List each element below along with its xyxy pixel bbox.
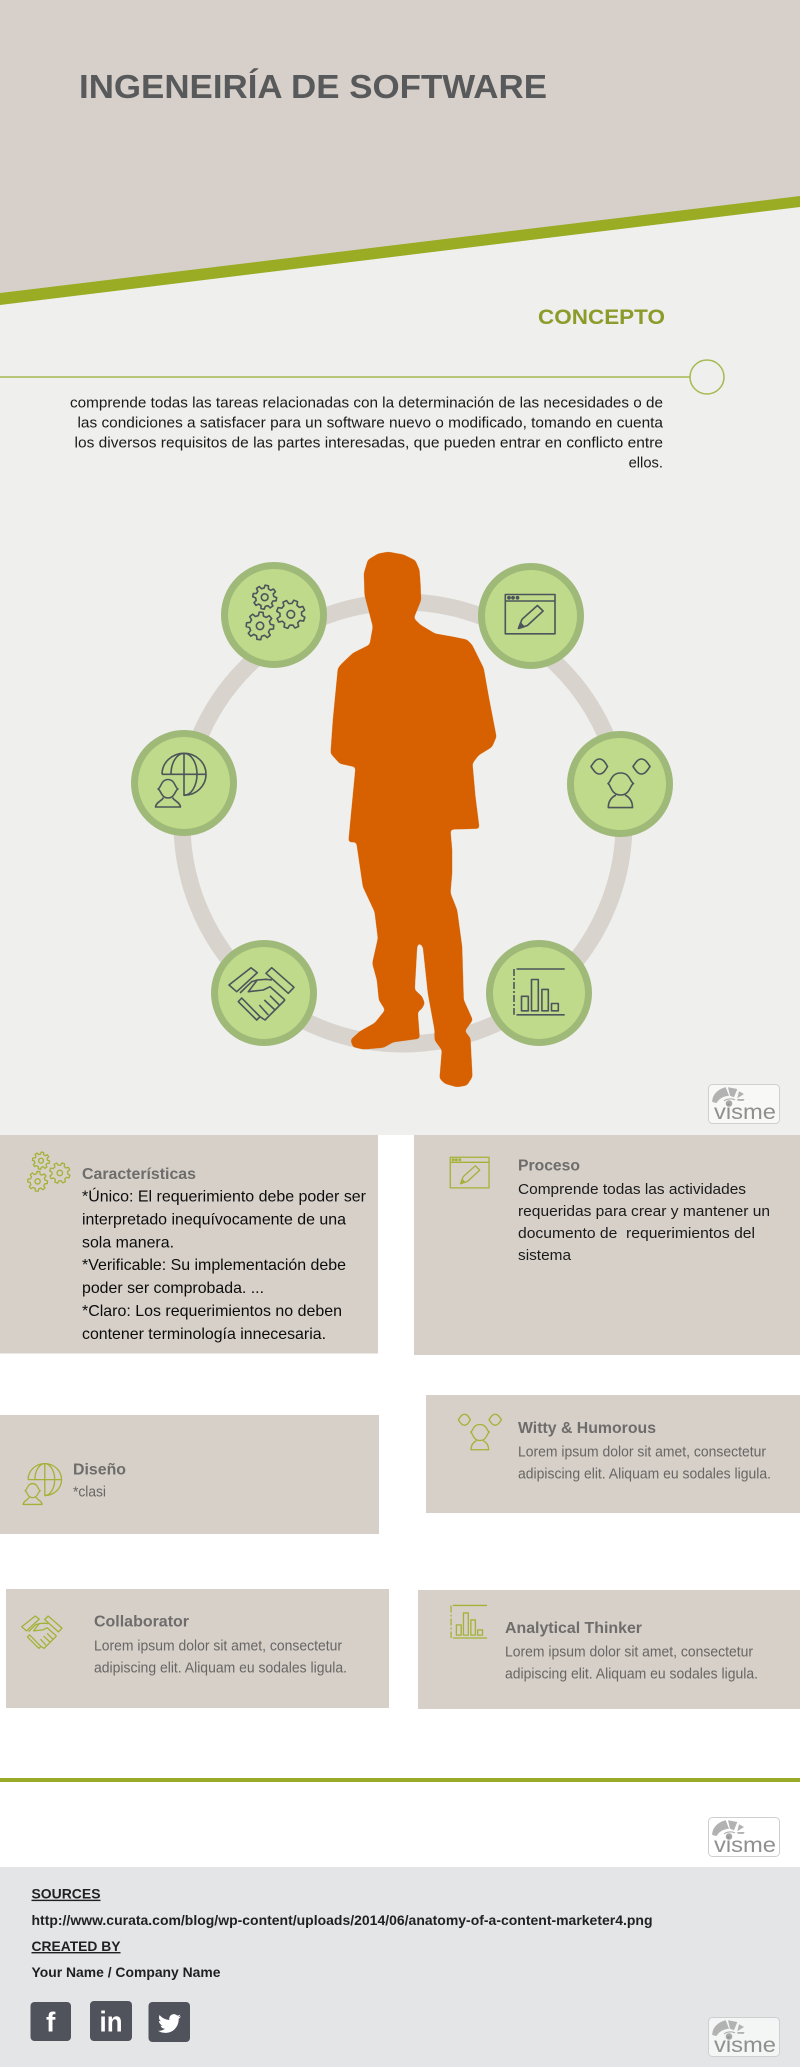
body text [505, 1645, 758, 1683]
icon: gears [27, 1151, 73, 1192]
icon: window with pencil [450, 1157, 489, 1188]
icon: bar chart [451, 1605, 487, 1638]
icon: facebook: f [46, 2007, 56, 2038]
body text [518, 1445, 771, 1483]
heading: Proceso [518, 1158, 580, 1175]
timeline line with circle marker [0, 360, 724, 394]
creator name: Your Name / Company Name [32, 1964, 221, 1980]
circle icon: people [570, 734, 670, 834]
visme badge 2: visme [714, 1834, 776, 1857]
body text: Lorem ipsum dolor sit amet, consectetur [518, 1445, 766, 1461]
body text: documento de requerimientos del [518, 1225, 755, 1242]
heading: Características [82, 1166, 196, 1183]
concept paragraph: ellos. [629, 454, 663, 472]
visme badge 1: visme [714, 1101, 776, 1124]
heading: concepto: CONCEPTO [538, 306, 665, 329]
visme badge 3: visme [714, 2034, 776, 2057]
visme badge 1 [708, 1084, 780, 1124]
visme badge 3 [708, 2018, 780, 2057]
body text: requeridas para crear y mantener un [518, 1203, 770, 1220]
card: Diseño [0, 1415, 379, 1534]
icon: handshake [22, 1616, 62, 1648]
icon: people [458, 1414, 501, 1450]
body text: interpretado inequívocamente de una [82, 1212, 346, 1228]
green divider bar [0, 1778, 800, 1782]
concept paragraph: comprende todas las tareas relacionadas con la determinación de las necesidades o de [70, 394, 663, 412]
card: Características [0, 1135, 378, 1354]
icon: twitter [148, 2002, 190, 2042]
circle icon: bar chart [490, 944, 588, 1042]
heading: Analytical Thinker [505, 1620, 642, 1637]
sources url: http://www.curata.com/blog/wp-content/uploads/2014/06/anatomy-of-a-content-marketer4.png [32, 1912, 652, 1928]
orange person silhouette [331, 552, 496, 1087]
icon: linkedin [90, 2001, 132, 2041]
heading: Diseño [73, 1461, 126, 1478]
body text: *Verificable: Su implementación debe [82, 1257, 346, 1274]
body text: *Único: El requerimiento debe poder ser [82, 1187, 367, 1206]
body text [94, 1639, 347, 1676]
concept paragraph [70, 394, 664, 472]
ring [182, 602, 624, 1044]
title: INGENEIRÍA DE SOFTWARE [79, 68, 547, 105]
body text: *Claro: Los requerimientos no deben [82, 1303, 342, 1320]
concept paragraph: los diversos requisitos de las partes interesadas, que pueden entrar en conflicto entre [74, 434, 663, 452]
icon: globe and person [23, 1464, 62, 1504]
body text: adipiscing elit. Aliquam eu sodales ligula. [94, 1660, 347, 1676]
concept paragraph: las condiciones a satisfacer para un software nuevo o modificado, tomando en cuenta [78, 414, 664, 432]
card: Witty & Humorous [426, 1395, 800, 1513]
header beige wedge [0, 0, 800, 293]
diagram: ring with icons and silhouette [134, 552, 670, 1087]
visme badge 2 [708, 1818, 780, 1857]
body text: adipiscing elit. Aliquam eu sodales ligula. [518, 1467, 771, 1483]
body text: contener terminología innecesaria. [82, 1326, 326, 1343]
body text: Lorem ipsum dolor sit amet, consectetur [505, 1645, 753, 1661]
icon: linkedin: in [100, 2007, 122, 2039]
circle icon: window with pencil [482, 566, 580, 666]
card: Collaborator [6, 1589, 389, 1708]
body text: sistema [518, 1247, 572, 1264]
green diagonal band [0, 196, 800, 305]
body text: adipiscing elit. Aliquam eu sodales ligula. [505, 1667, 758, 1683]
created by heading: CREATED BY [32, 1938, 121, 1954]
body text: Comprende todas las actividades [518, 1181, 746, 1198]
circle icon: globe and person [134, 734, 234, 832]
circle icon: handshake [214, 944, 314, 1042]
body text [518, 1181, 770, 1264]
body text: poder ser comprobada. ... [82, 1280, 264, 1297]
sources heading: SOURCES [32, 1886, 100, 1902]
card: Proceso [414, 1135, 800, 1355]
icon: facebook [30, 2002, 71, 2041]
heading: Collaborator [94, 1614, 189, 1631]
body text [82, 1187, 367, 1343]
card: Analytical Thinker [418, 1590, 800, 1709]
light page background [0, 0, 800, 1135]
body text: Lorem ipsum dolor sit amet, consectetur [94, 1639, 342, 1655]
heading: Witty & Humorous [518, 1420, 656, 1437]
circle icon: gears [224, 566, 324, 664]
footer panel [0, 1867, 800, 2067]
body text: sola manera. [82, 1234, 174, 1251]
body text: *clasi [73, 1485, 106, 1501]
